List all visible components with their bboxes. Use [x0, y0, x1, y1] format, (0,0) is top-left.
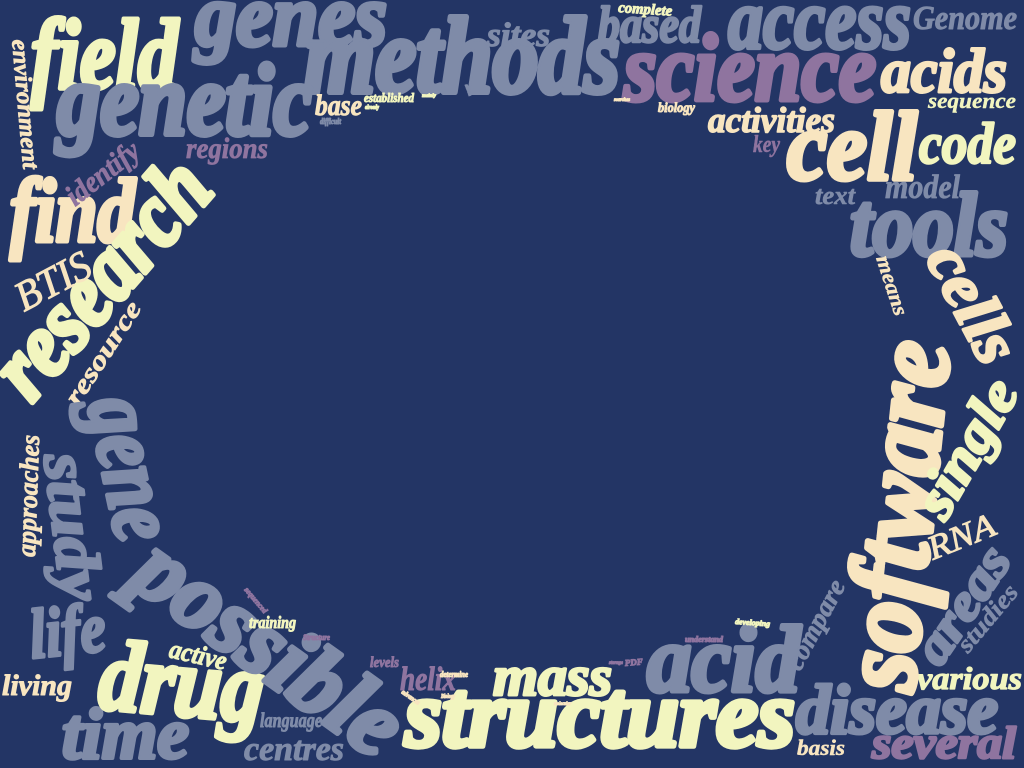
- word: living: living: [2, 669, 72, 702]
- word: sites: sites: [486, 17, 550, 54]
- tiny word: Biology: Biology: [440, 694, 455, 700]
- word: RNA: RNA: [921, 507, 1001, 568]
- word: life: life: [26, 589, 109, 674]
- tiny word: already: already: [365, 105, 379, 111]
- word: identify: identify: [59, 134, 147, 213]
- word: find: find: [10, 162, 137, 261]
- word: complete: complete: [618, 0, 673, 20]
- tiny word: searches: searches: [613, 98, 630, 103]
- word: centres: centres: [244, 731, 344, 768]
- word: model: model: [885, 169, 960, 206]
- word: basis: basis: [797, 735, 845, 760]
- tiny word: mainly: mainly: [422, 94, 437, 99]
- tiny word: storage: storage: [608, 661, 624, 666]
- tiny word: developing: developing: [735, 617, 770, 628]
- word: helix: helix: [400, 661, 456, 698]
- word: mass: mass: [493, 646, 612, 708]
- word: BTIS: BTIS: [7, 243, 99, 321]
- tiny word: molecular: molecular: [554, 702, 571, 707]
- tiny word: understand: understand: [685, 635, 724, 644]
- word: tools: tools: [850, 176, 1008, 275]
- tiny word: PDF: PDF: [624, 656, 643, 668]
- word: regions: regions: [186, 132, 268, 165]
- word: methods: methods: [304, 0, 620, 116]
- word: software: software: [818, 335, 973, 696]
- word: key: key: [753, 132, 780, 158]
- word: various: various: [917, 660, 1022, 696]
- word: single: single: [902, 368, 1024, 529]
- word: established: established: [364, 90, 414, 105]
- word: base: base: [315, 89, 362, 122]
- tiny word: advances: advances: [400, 688, 422, 707]
- tiny word: shown: shown: [463, 83, 472, 97]
- word: text: text: [815, 181, 856, 210]
- word: gene: gene: [68, 385, 195, 549]
- tiny word: sequenced: sequenced: [242, 585, 270, 616]
- word: active: active: [167, 634, 230, 676]
- word: determine: determine: [440, 670, 468, 679]
- word: field: field: [31, 0, 180, 110]
- word: compare: compare: [779, 574, 851, 675]
- word: sequence: sequence: [927, 88, 1016, 113]
- word: means: means: [871, 252, 913, 319]
- tiny word: difficult: difficult: [320, 117, 342, 126]
- word: training: training: [249, 613, 296, 632]
- word: activities: activities: [708, 100, 835, 140]
- word: areas: areas: [903, 535, 1023, 675]
- word: levels: levels: [370, 655, 399, 671]
- word: acid: acid: [647, 608, 802, 712]
- word: resource: resource: [59, 296, 147, 410]
- word: study: study: [30, 448, 116, 605]
- word: biology: biology: [658, 101, 696, 116]
- tiny word: Structure: Structure: [303, 633, 330, 642]
- word: approaches: approaches: [11, 434, 45, 557]
- word: several: several: [871, 718, 1017, 768]
- tiny word: elements: elements: [502, 702, 517, 707]
- word: studies: studies: [951, 579, 1024, 659]
- word: cell: cell: [787, 93, 918, 201]
- word: environment: environment: [6, 38, 43, 171]
- word: disease: disease: [796, 672, 998, 749]
- word: acids: acids: [881, 38, 1007, 106]
- word: genetic: genetic: [55, 44, 312, 157]
- word: science: science: [623, 15, 876, 121]
- word: drug: drug: [95, 619, 269, 744]
- word: structures: structures: [404, 661, 795, 767]
- word: language: language: [260, 708, 322, 732]
